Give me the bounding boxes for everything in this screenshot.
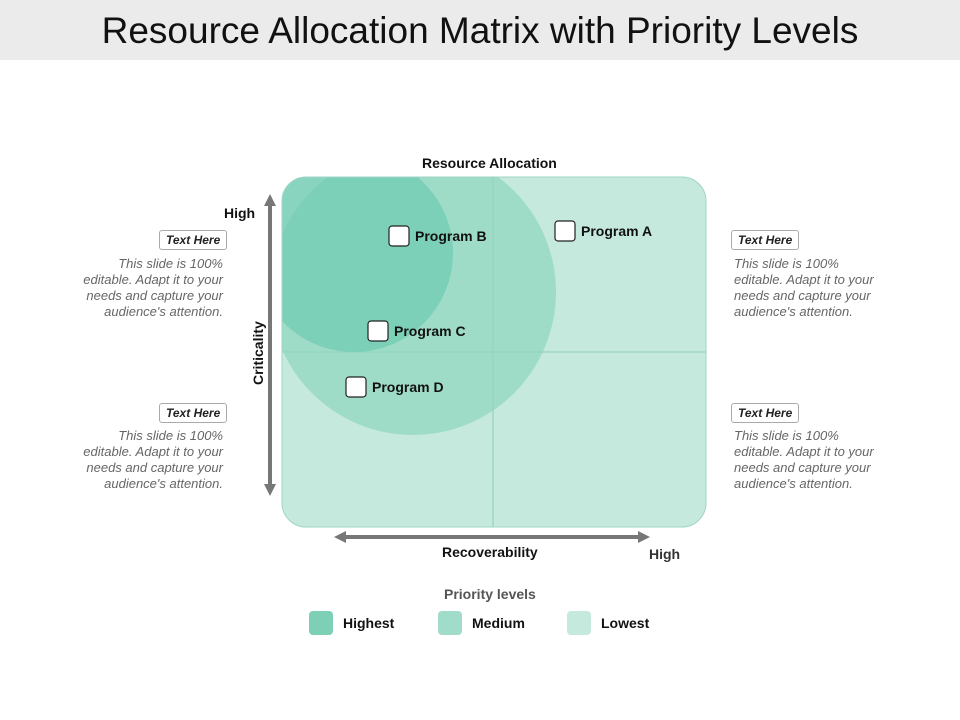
left bottom text: Text Here — [166, 406, 220, 420]
right bottom text: Text Here — [738, 406, 792, 420]
matrix chart: Program A — [581, 223, 652, 239]
right top text — [731, 230, 799, 250]
left top text — [159, 230, 227, 250]
legend swatches — [309, 611, 333, 635]
matrix chart: Program D — [372, 379, 444, 395]
arrows — [268, 202, 272, 488]
title bar: Resource Allocation Matrix with Priority Levels — [102, 10, 858, 51]
text: This slide is 100% editable. Adapt it to your needs and capture your audience's attention. — [734, 256, 874, 319]
program boxes — [346, 221, 575, 397]
matrix chart: Criticality — [250, 321, 266, 385]
left bottom text — [159, 403, 227, 423]
matrix chart: Medium — [472, 615, 525, 631]
matrix chart: Program B — [415, 228, 487, 244]
text: This slide is 100% editable. Adapt it to your needs and capture your audience's attention. — [83, 428, 223, 491]
matrix chart: Priority levels — [444, 586, 536, 602]
matrix chart: Recoverability — [442, 544, 538, 560]
matrix chart: High — [649, 546, 680, 562]
matrix chart: Program C — [394, 323, 466, 339]
text: This slide is 100% editable. Adapt it to your needs and capture your audience's attention. — [83, 256, 223, 319]
right top text: Text Here — [738, 233, 792, 247]
text: This slide is 100% editable. Adapt it to your needs and capture your audience's attention. — [734, 428, 874, 491]
matrix chart: Lowest — [601, 615, 650, 631]
left top text: Text Here — [166, 233, 220, 247]
title bar — [0, 0, 960, 60]
matrix chart — [224, 158, 706, 635]
matrix chart: High — [224, 205, 255, 221]
matrix chart: Highest — [343, 615, 395, 631]
matrix chart: Resource Allocation — [422, 155, 557, 171]
right bottom text — [731, 403, 799, 423]
